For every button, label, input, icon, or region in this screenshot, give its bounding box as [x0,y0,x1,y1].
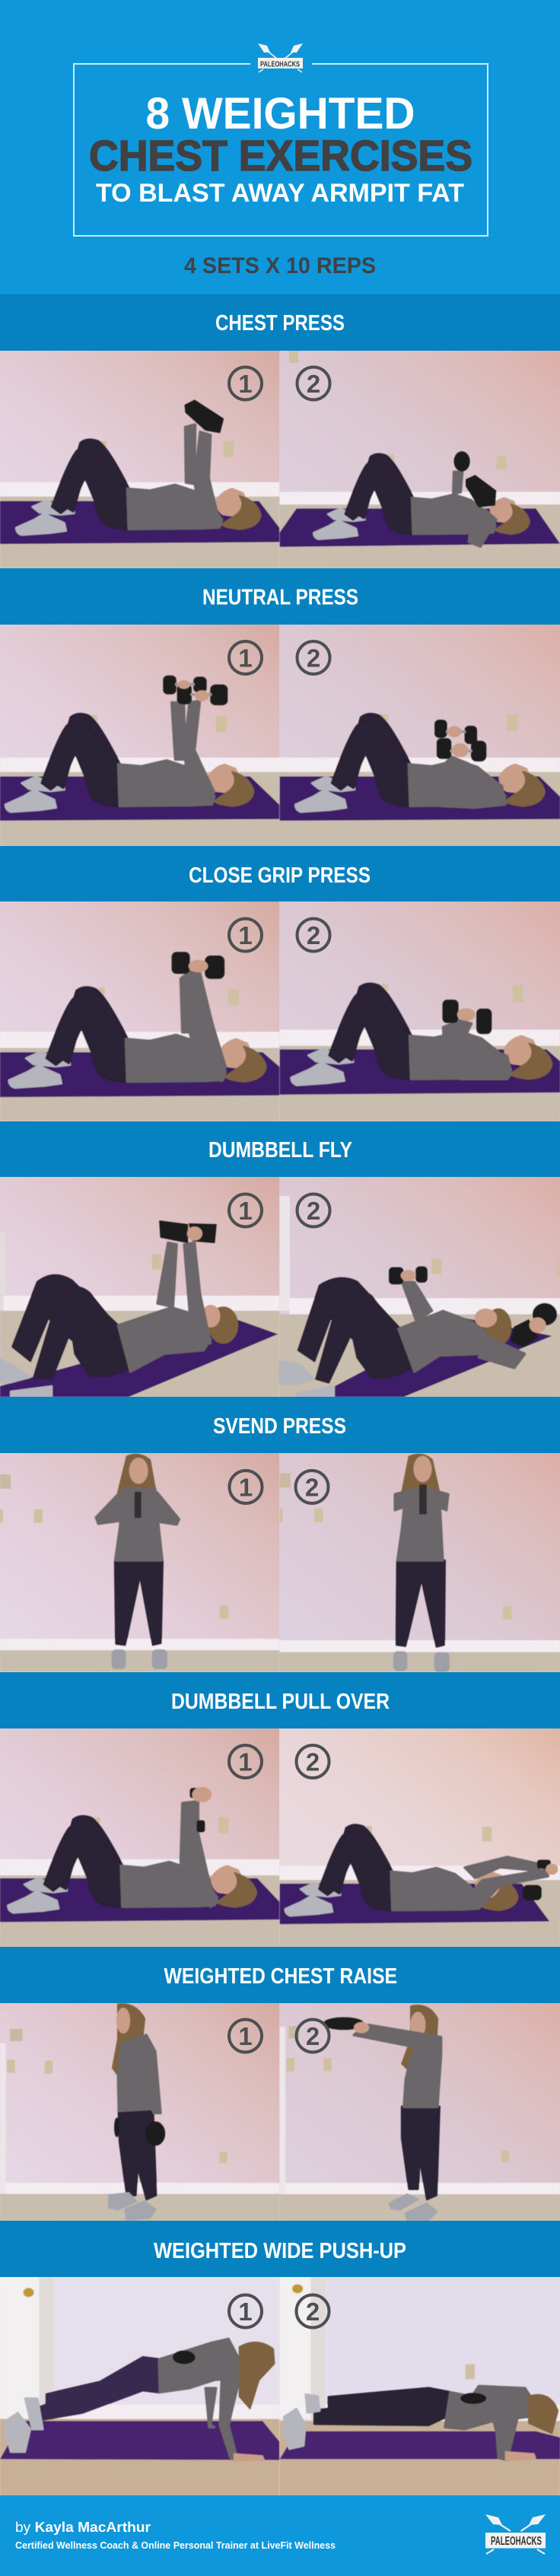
step markers: dumbbell fly: 1 [238,1197,253,1225]
step markers: weighted chest raise [229,2019,329,2053]
sets and reps: 4 SETS X 10 REPS [184,253,376,278]
step markers: chest press: 2 [307,370,320,398]
band: close grip press: CLOSE GRIP PRESS [189,863,371,888]
band: neutral press [0,568,560,625]
title line 3: TO BLAST AWAY ARMPIT FAT [96,179,464,208]
panel: close grip press [0,902,560,1121]
panel: weighted chest raise [0,2003,560,2221]
panel: dumbbell fly [0,1177,560,1397]
panel: svend press [0,1453,560,1672]
band: weighted chest raise: WEIGHTED CHEST RAISE [164,1964,397,1989]
step markers: close grip press: 2 [307,921,320,949]
step markers: neutral press: 1 [238,644,253,673]
band: dumbbell fly: DUMBBELL FLY [208,1138,352,1162]
band: dumbbell pull over: DUMBBELL PULL OVER [171,1690,390,1714]
band: neutral press: NEUTRAL PRESS [202,586,358,610]
step markers: dumbbell pull over: 1 [238,1748,253,1776]
header background [0,0,560,294]
author credit: by Kayla MacArthur [15,2520,151,2535]
icon: PaleoHacks logo [258,43,303,72]
step markers: neutral press [229,641,330,674]
band: chest press: CHEST PRESS [215,311,345,336]
footer background [0,2495,560,2576]
step markers: dumbbell fly: 2 [307,1197,320,1225]
step markers: weighted wide push-up: 1 [238,2298,253,2326]
author description: Certified Wellness Coach & Online Personal Trainer at LiveFit Wellness [15,2539,336,2551]
step markers: svend press: 2 [305,1473,319,1502]
step markers: chest press [229,367,330,400]
icon: PaleoHacks logo: PALEOHACKS [260,59,300,68]
step markers: svend press: 1 [239,1473,253,1502]
panel: dumbbell pull over [0,1728,560,1947]
step markers: close grip press: 1 [238,921,253,949]
panel: chest press [0,350,560,568]
step markers: svend press [230,1471,329,1503]
band: chest press [0,294,560,351]
step markers: weighted chest raise: 2 [306,2022,320,2050]
band: dumbbell pull over [0,1672,560,1728]
step markers: neutral press: 2 [307,644,320,673]
band: close grip press [0,846,560,902]
title line 1: 8 WEIGHTED [146,89,415,138]
step markers: dumbbell fly [229,1194,330,1226]
band: svend press [0,1397,560,1453]
band: svend press: SVEND PRESS [213,1414,346,1439]
band: weighted wide push-up [0,2221,560,2277]
panel: weighted wide push-up [0,2277,560,2495]
title frame [74,64,488,236]
step markers: close grip press [229,919,330,951]
icon: footer PaleoHacks logo [485,2514,546,2554]
band: weighted wide push-up: WEIGHTED WIDE PUSH-UP [154,2239,406,2263]
band: dumbbell fly [0,1121,560,1177]
step markers: chest press: 1 [238,370,253,398]
title line 2: CHEST EXERCISES [89,132,473,180]
step markers: dumbbell pull over: 2 [306,1748,320,1776]
step markers: dumbbell pull over [229,1745,329,1778]
panel: neutral press [0,625,560,846]
band: weighted chest raise [0,1947,560,2003]
step markers: weighted wide push-up [229,2295,329,2328]
step markers: weighted wide push-up: 2 [306,2298,320,2326]
step markers: weighted chest raise: 1 [238,2022,253,2050]
